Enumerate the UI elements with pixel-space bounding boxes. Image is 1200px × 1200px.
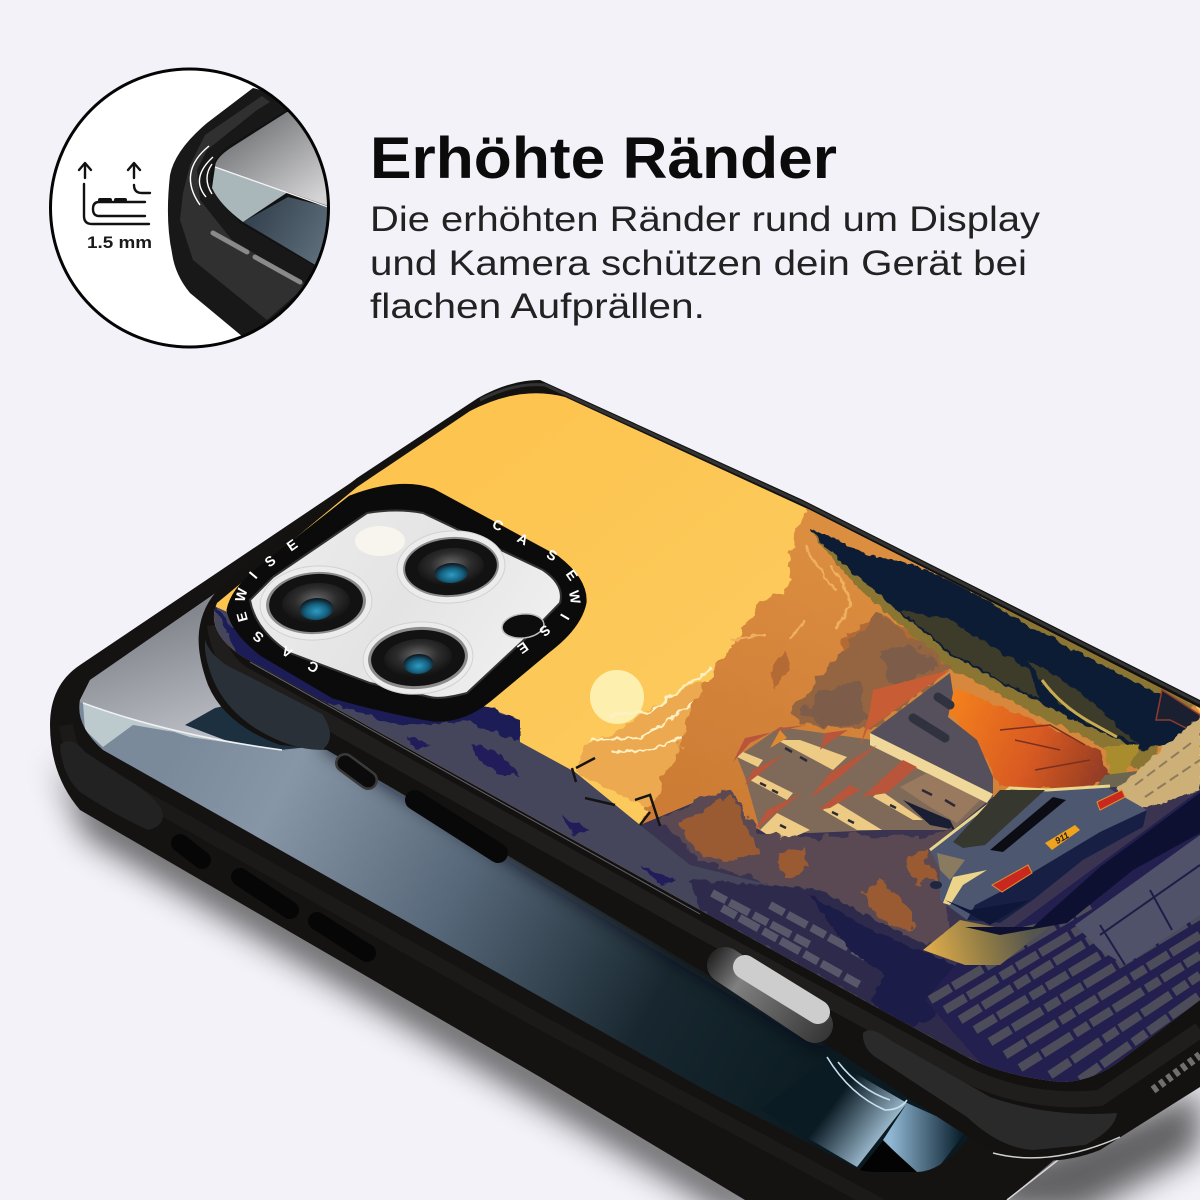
tail light left <box>992 865 1032 892</box>
CASEWISE ring lettering: E <box>563 567 581 583</box>
CASEWISE ring lettering: I <box>246 568 260 582</box>
base under foliage and road <box>640 780 1200 1090</box>
plate number: 911 <box>1053 830 1071 846</box>
sky <box>200 380 1200 1100</box>
camera ring and lens module <box>228 485 585 720</box>
ground behind car <box>1097 771 1138 788</box>
description text: flachen Aufprällen. <box>370 287 705 326</box>
rock wall base <box>690 880 1000 1075</box>
mountain ridge streaks <box>730 545 850 640</box>
close-up screen dark blue wedge <box>243 197 340 280</box>
sunlit road <box>923 918 1060 965</box>
roof rim highlight <box>930 786 1110 850</box>
shadow from front phone <box>327 735 830 1040</box>
foliage warm patches <box>680 795 935 930</box>
back phone button 1 <box>180 843 202 860</box>
charging port silver <box>745 967 818 1012</box>
title: Erhöhte Ränder <box>370 126 837 191</box>
distant house top right <box>1156 690 1200 735</box>
power button <box>415 800 498 853</box>
back phone <box>50 480 1060 1200</box>
pale ridge stripe <box>1042 680 1117 737</box>
charging port recess <box>725 965 815 1025</box>
drop shadow under phones <box>55 760 1200 1200</box>
right edge speaker slot <box>1153 1055 1200 1090</box>
bench and figure silhouettes <box>572 758 660 826</box>
lens left <box>258 562 374 644</box>
blue light beam left <box>810 1074 907 1167</box>
camera rim line <box>134 185 150 193</box>
top edge highlight <box>480 385 1200 703</box>
CASEWISE ring lettering: A <box>279 643 295 661</box>
keep windows <box>913 697 950 738</box>
road slab joints <box>1100 865 1200 965</box>
device bumps <box>100 198 125 202</box>
close-up screen upper glass <box>215 112 340 210</box>
impact arcs <box>190 146 213 205</box>
car shadow <box>965 793 1200 935</box>
cloud streaks <box>590 668 712 752</box>
left corner carbon pad <box>205 640 330 750</box>
mountain <box>642 508 1200 830</box>
teal reflection below curve <box>83 704 233 747</box>
height diagram icon <box>79 163 150 224</box>
cobble road base <box>925 790 1200 1090</box>
screen reflection grey <box>80 594 299 750</box>
sunset clouds <box>576 681 702 808</box>
orange autumn tree <box>950 687 1110 790</box>
mountain shaded patches <box>770 613 950 690</box>
front phone body <box>199 380 1200 1161</box>
engine louver <box>990 797 1066 852</box>
mauve shadow trees behind castle <box>800 645 940 727</box>
CASEWISE ring lettering: C <box>490 516 506 534</box>
lens top right <box>395 527 507 607</box>
CASEWISE ring lettering: A <box>515 530 531 548</box>
castle windows <box>760 748 955 828</box>
camera bumper outer <box>228 485 585 720</box>
flash <box>355 526 405 556</box>
CASEWISE ring lettering: S <box>544 546 560 564</box>
CASEWISE ring lettering: S <box>250 628 266 646</box>
description text: Die erhöhten Ränder rund um Display <box>370 200 1041 239</box>
car body <box>930 787 1147 923</box>
yellow bush right of tree <box>1104 744 1140 774</box>
dark olive tree patches <box>900 610 1140 745</box>
outer rim line <box>84 184 149 224</box>
back phone side edge light <box>1007 1160 1058 1200</box>
right arrow <box>128 163 140 178</box>
tree branches <box>1000 725 1090 770</box>
left arrow <box>79 163 91 178</box>
cream facades <box>737 740 923 843</box>
CASEWISE ring lettering: W <box>232 586 251 603</box>
sun <box>590 670 644 724</box>
front phone top bevel <box>215 625 1200 1099</box>
purple ground edge under camera <box>210 600 520 742</box>
callout circle: raised edge close-up <box>50 69 340 347</box>
lens bottom <box>361 618 475 698</box>
dark reflection blob <box>185 706 302 750</box>
brown trees behind castle <box>793 613 950 730</box>
foliage under castle <box>660 790 950 950</box>
close-up screen lower teal <box>212 167 288 222</box>
bottom rim white highlight <box>993 1137 1120 1158</box>
side mirror <box>930 881 942 889</box>
CASEWISE ring lettering: S <box>261 552 279 570</box>
speaker button <box>345 763 368 780</box>
left side glass <box>937 853 965 880</box>
description text <box>370 200 1041 326</box>
back phone bumper highlight <box>66 725 880 1200</box>
cobble road stones <box>930 885 1200 1080</box>
back phone button 2 <box>240 877 290 910</box>
circle white background <box>50 69 328 347</box>
CASEWISE ring lettering <box>232 516 584 676</box>
tail light right <box>1097 790 1125 810</box>
CASEWISE ring lettering: C <box>305 658 321 676</box>
main red roof <box>860 670 950 747</box>
screen edge highlight <box>250 662 700 914</box>
close-up screen white line <box>215 167 328 207</box>
CASEWISE ring lettering: S <box>536 622 554 640</box>
microphone hole <box>501 612 545 640</box>
licence plate <box>1045 825 1080 850</box>
keep cream strip <box>870 733 993 803</box>
close-up bumper <box>168 88 340 337</box>
camera glass plate <box>250 510 561 698</box>
ground <box>200 600 1100 1090</box>
cream fender <box>943 870 987 905</box>
large road slabs <box>1075 835 1200 965</box>
right stone wall <box>1117 717 1200 812</box>
CASEWISE ring lettering: I <box>557 611 573 623</box>
close-up screen black surround <box>210 110 340 280</box>
lower body dark <box>967 810 1147 923</box>
device outline <box>93 202 145 216</box>
front phone <box>199 380 1200 1161</box>
ground purple blotches <box>405 735 675 885</box>
main keep wall <box>870 673 993 797</box>
back phone screen <box>79 594 970 1172</box>
blue light beam right <box>883 1103 967 1172</box>
CASEWISE ring lettering: E <box>284 536 300 554</box>
back phone carbon pad <box>60 741 163 830</box>
close-up phone corner <box>168 88 340 337</box>
black wedge <box>858 1141 917 1172</box>
close-up bumper lighter band <box>180 96 307 320</box>
rear window <box>953 790 1045 848</box>
forest olive fringe <box>808 528 1200 775</box>
description text: und Kamera schützen dein Gerät bei <box>370 244 1027 283</box>
lower wing wall <box>900 773 980 823</box>
white reflection curve <box>83 703 282 750</box>
back phone bumper <box>50 480 1060 1200</box>
white light arcs <box>827 1057 907 1110</box>
CASEWISE ring lettering: W <box>566 589 584 606</box>
case artwork: alpine castle and sports car at sunset <box>200 380 1200 1100</box>
CASEWISE ring lettering: E <box>233 610 251 624</box>
close-up highlights <box>213 233 300 282</box>
gold gable <box>770 730 787 748</box>
dark forest <box>808 528 1200 750</box>
castle walls <box>737 727 993 833</box>
circle outline <box>50 69 328 347</box>
back phone button 3 <box>317 921 367 953</box>
wall joints <box>1135 740 1200 797</box>
1.5 mm label: 1.5 mm <box>87 233 152 252</box>
CASEWISE ring lettering: E <box>515 639 531 657</box>
dark cypress <box>903 800 955 830</box>
sports car <box>930 786 1147 925</box>
dark purple mound <box>810 895 960 1030</box>
bottom corner carbon pad <box>863 1030 1117 1150</box>
small red roofs <box>733 725 917 830</box>
rock wall stones <box>712 893 880 985</box>
bumper underside <box>945 900 1030 925</box>
